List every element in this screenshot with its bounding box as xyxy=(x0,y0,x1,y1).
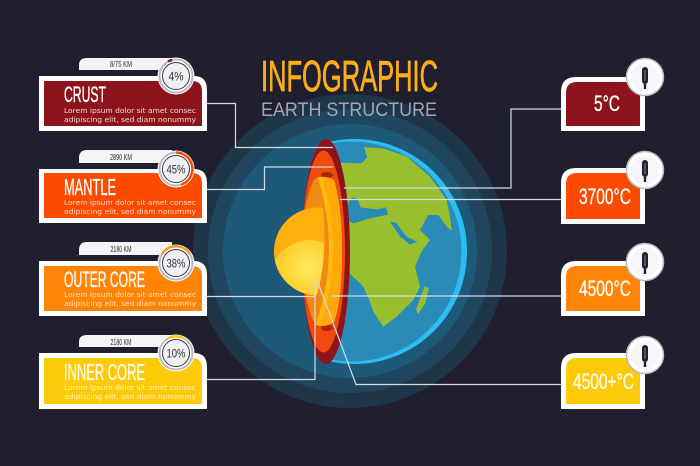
icon: thermometer xyxy=(626,152,664,188)
tab xyxy=(79,58,172,70)
temperature card: outer core: 4500°C xyxy=(579,276,631,301)
card: inner core: 2180 KM xyxy=(110,338,132,347)
outer core layer xyxy=(306,176,342,326)
card: inner core: adipiscing elit, sed diam nonummy xyxy=(64,393,196,401)
card: crust: CRUST xyxy=(64,82,106,107)
continents xyxy=(337,147,452,327)
ocean inner xyxy=(332,142,462,362)
temperature card: crust xyxy=(561,58,664,131)
percent badge xyxy=(158,150,194,188)
crust layer xyxy=(302,139,350,364)
icon: thermometer xyxy=(626,244,664,280)
ocean rim xyxy=(331,139,467,364)
card: crust: adipiscing elit, sed diam nonummy xyxy=(64,116,196,124)
percent badge: 10% xyxy=(166,346,186,360)
percent badge xyxy=(158,244,194,282)
temperature card: mantle: 3700°C xyxy=(579,184,631,209)
card: mantle: Lorem ipsum dolor sit amet consec xyxy=(64,199,196,207)
card: inner core: Lorem ipsum dolor sit amet consec xyxy=(64,384,196,392)
temperature card: inner core xyxy=(561,336,664,409)
percent badge: 4% xyxy=(168,70,184,84)
subtitle: EARTH STRUCTURE xyxy=(261,100,437,121)
card: outer core: adipiscing elit, sed diam nonummy xyxy=(64,300,196,308)
temperature card: crust: 5°C xyxy=(594,91,620,116)
card: mantle xyxy=(39,150,207,223)
core markers xyxy=(321,172,333,331)
card: outer core xyxy=(39,242,207,316)
percent badge: 38% xyxy=(166,256,186,270)
percent badge xyxy=(158,58,194,94)
card: mantle: 2890 KM xyxy=(110,153,132,162)
card: inner core: INNER CORE xyxy=(64,359,145,385)
card: crust: Lorem ipsum dolor sit amet consec xyxy=(64,107,196,115)
title: INFOGRAPHIC xyxy=(261,52,438,101)
card: outer core: Lorem ipsum dolor sit amet consec xyxy=(64,291,196,299)
card: crust: 8/75 KM xyxy=(110,60,132,69)
card: outer core: 2180 KM xyxy=(110,245,132,254)
temperature card: outer core xyxy=(561,244,664,316)
card: mantle: adipiscing elit, sed diam nonummy xyxy=(64,208,196,216)
temperature card: mantle xyxy=(561,152,664,224)
card: outer core: OUTER CORE xyxy=(64,267,145,292)
card: inner core xyxy=(39,334,207,409)
mantle layer xyxy=(302,150,345,352)
percent badge: 45% xyxy=(166,162,186,176)
earth globe xyxy=(331,139,467,364)
connector lines xyxy=(207,104,561,384)
icon: thermometer xyxy=(626,336,664,374)
percent badge xyxy=(158,334,194,372)
atmosphere halos xyxy=(193,94,507,408)
icon: thermometer xyxy=(626,58,664,96)
card: mantle: MANTLE xyxy=(64,174,116,200)
temperature card: inner core: 4500+°C xyxy=(573,369,634,394)
card: crust xyxy=(39,58,207,131)
cross-section of earth layers xyxy=(274,139,350,364)
inner core ball xyxy=(274,208,324,296)
